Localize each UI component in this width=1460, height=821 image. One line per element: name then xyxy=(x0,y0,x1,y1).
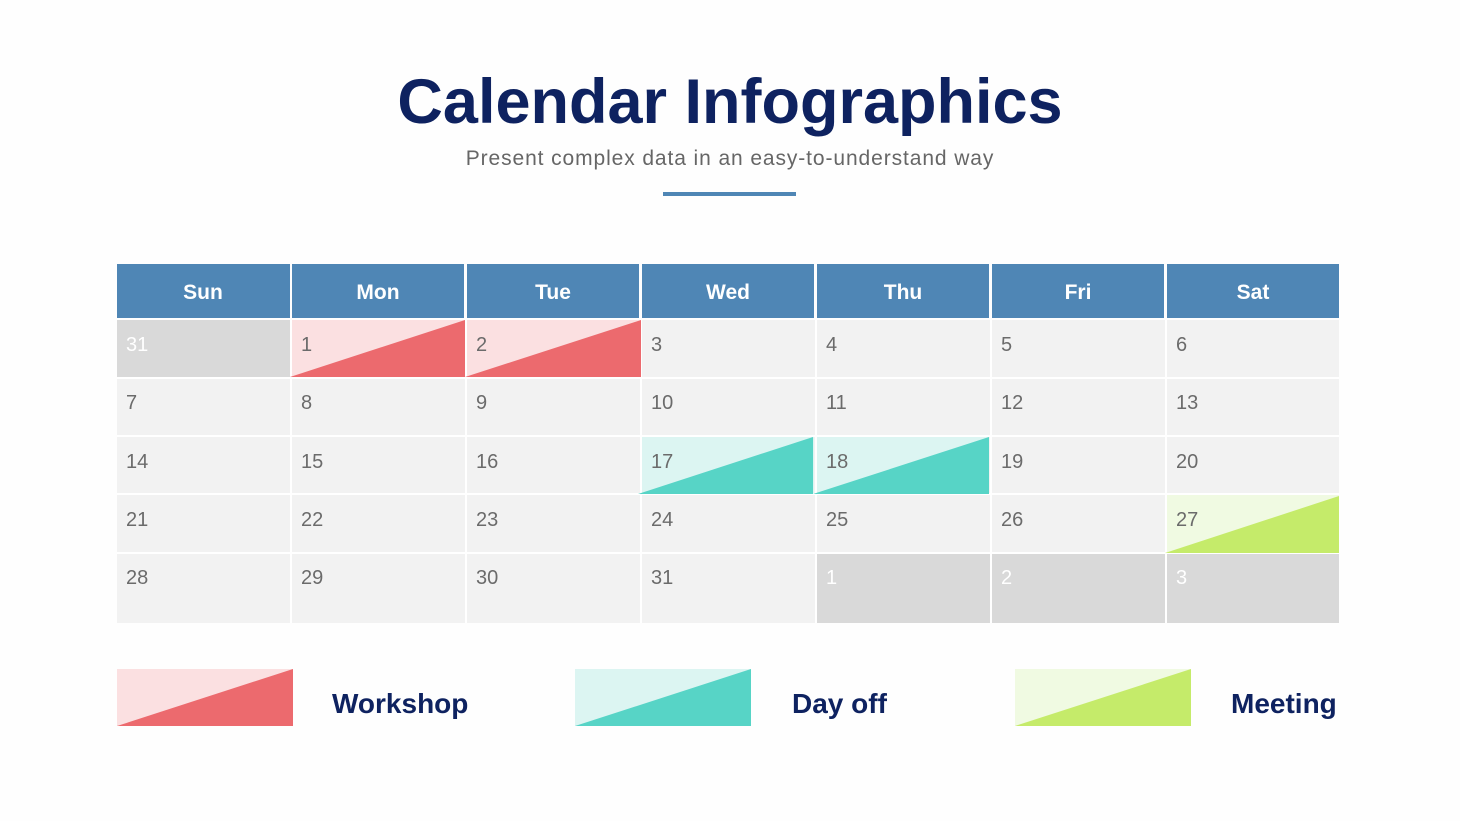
legend: meeting xyxy=(1015,669,1337,726)
day numbers: 21 xyxy=(126,509,148,531)
day numbers: 31 xyxy=(126,334,148,356)
day numbers xyxy=(126,334,1198,589)
day numbers: 2 xyxy=(476,334,487,356)
header row: Fri xyxy=(1065,281,1091,304)
day numbers: 15 xyxy=(301,451,323,473)
legend: day off xyxy=(575,669,888,726)
header row: Sun xyxy=(183,281,223,304)
subtitle: Present complex data in an easy-to-understand way xyxy=(466,147,994,170)
day numbers: 22 xyxy=(301,509,323,531)
day numbers: 12 xyxy=(1001,392,1023,414)
legend: day off: Day off xyxy=(792,688,888,719)
day numbers: 30 xyxy=(476,567,498,589)
workshop cells xyxy=(290,320,641,377)
day numbers: 1 xyxy=(826,567,837,589)
day numbers: 19 xyxy=(1001,451,1023,473)
day numbers: 9 xyxy=(476,392,487,414)
day numbers: 3 xyxy=(1176,567,1187,589)
day numbers: 17 xyxy=(651,451,673,473)
day numbers: 31 xyxy=(651,567,673,589)
legend: meeting: Meeting xyxy=(1231,688,1337,719)
day cells xyxy=(117,320,1339,623)
day numbers: 24 xyxy=(651,509,673,531)
header row: Sat xyxy=(1237,281,1269,304)
day numbers: 11 xyxy=(826,392,847,414)
day numbers: 20 xyxy=(1176,451,1198,473)
day numbers: 14 xyxy=(126,451,148,473)
gray out-of-month cells xyxy=(117,320,1339,623)
day numbers: 25 xyxy=(826,509,848,531)
meeting cell xyxy=(1165,495,1339,553)
header row: Tue xyxy=(535,281,571,304)
header row: Wed xyxy=(706,281,750,304)
day numbers: 4 xyxy=(826,334,837,356)
day numbers: 7 xyxy=(126,392,137,414)
day numbers: 13 xyxy=(1176,392,1198,414)
day numbers: 18 xyxy=(826,451,848,473)
day numbers: 26 xyxy=(1001,509,1023,531)
day off cells xyxy=(638,437,989,494)
day numbers: 27 xyxy=(1176,509,1198,531)
header row xyxy=(117,264,1339,318)
day numbers: 28 xyxy=(126,567,148,589)
day numbers: 2 xyxy=(1001,567,1012,589)
day numbers: 8 xyxy=(301,392,312,414)
day numbers: 3 xyxy=(651,334,662,356)
legend: workshop: Workshop xyxy=(332,688,468,719)
legend: workshop xyxy=(117,669,468,726)
day numbers: 10 xyxy=(651,392,673,414)
day numbers: 23 xyxy=(476,509,498,531)
header row: Thu xyxy=(884,281,922,304)
day numbers: 5 xyxy=(1001,334,1012,356)
title: Calendar Infographics xyxy=(397,67,1063,137)
day numbers: 29 xyxy=(301,567,323,589)
day numbers: 6 xyxy=(1176,334,1187,356)
underline accent xyxy=(663,192,796,196)
day numbers: 16 xyxy=(476,451,498,473)
header row: Mon xyxy=(356,281,400,304)
day numbers: 1 xyxy=(301,334,312,356)
